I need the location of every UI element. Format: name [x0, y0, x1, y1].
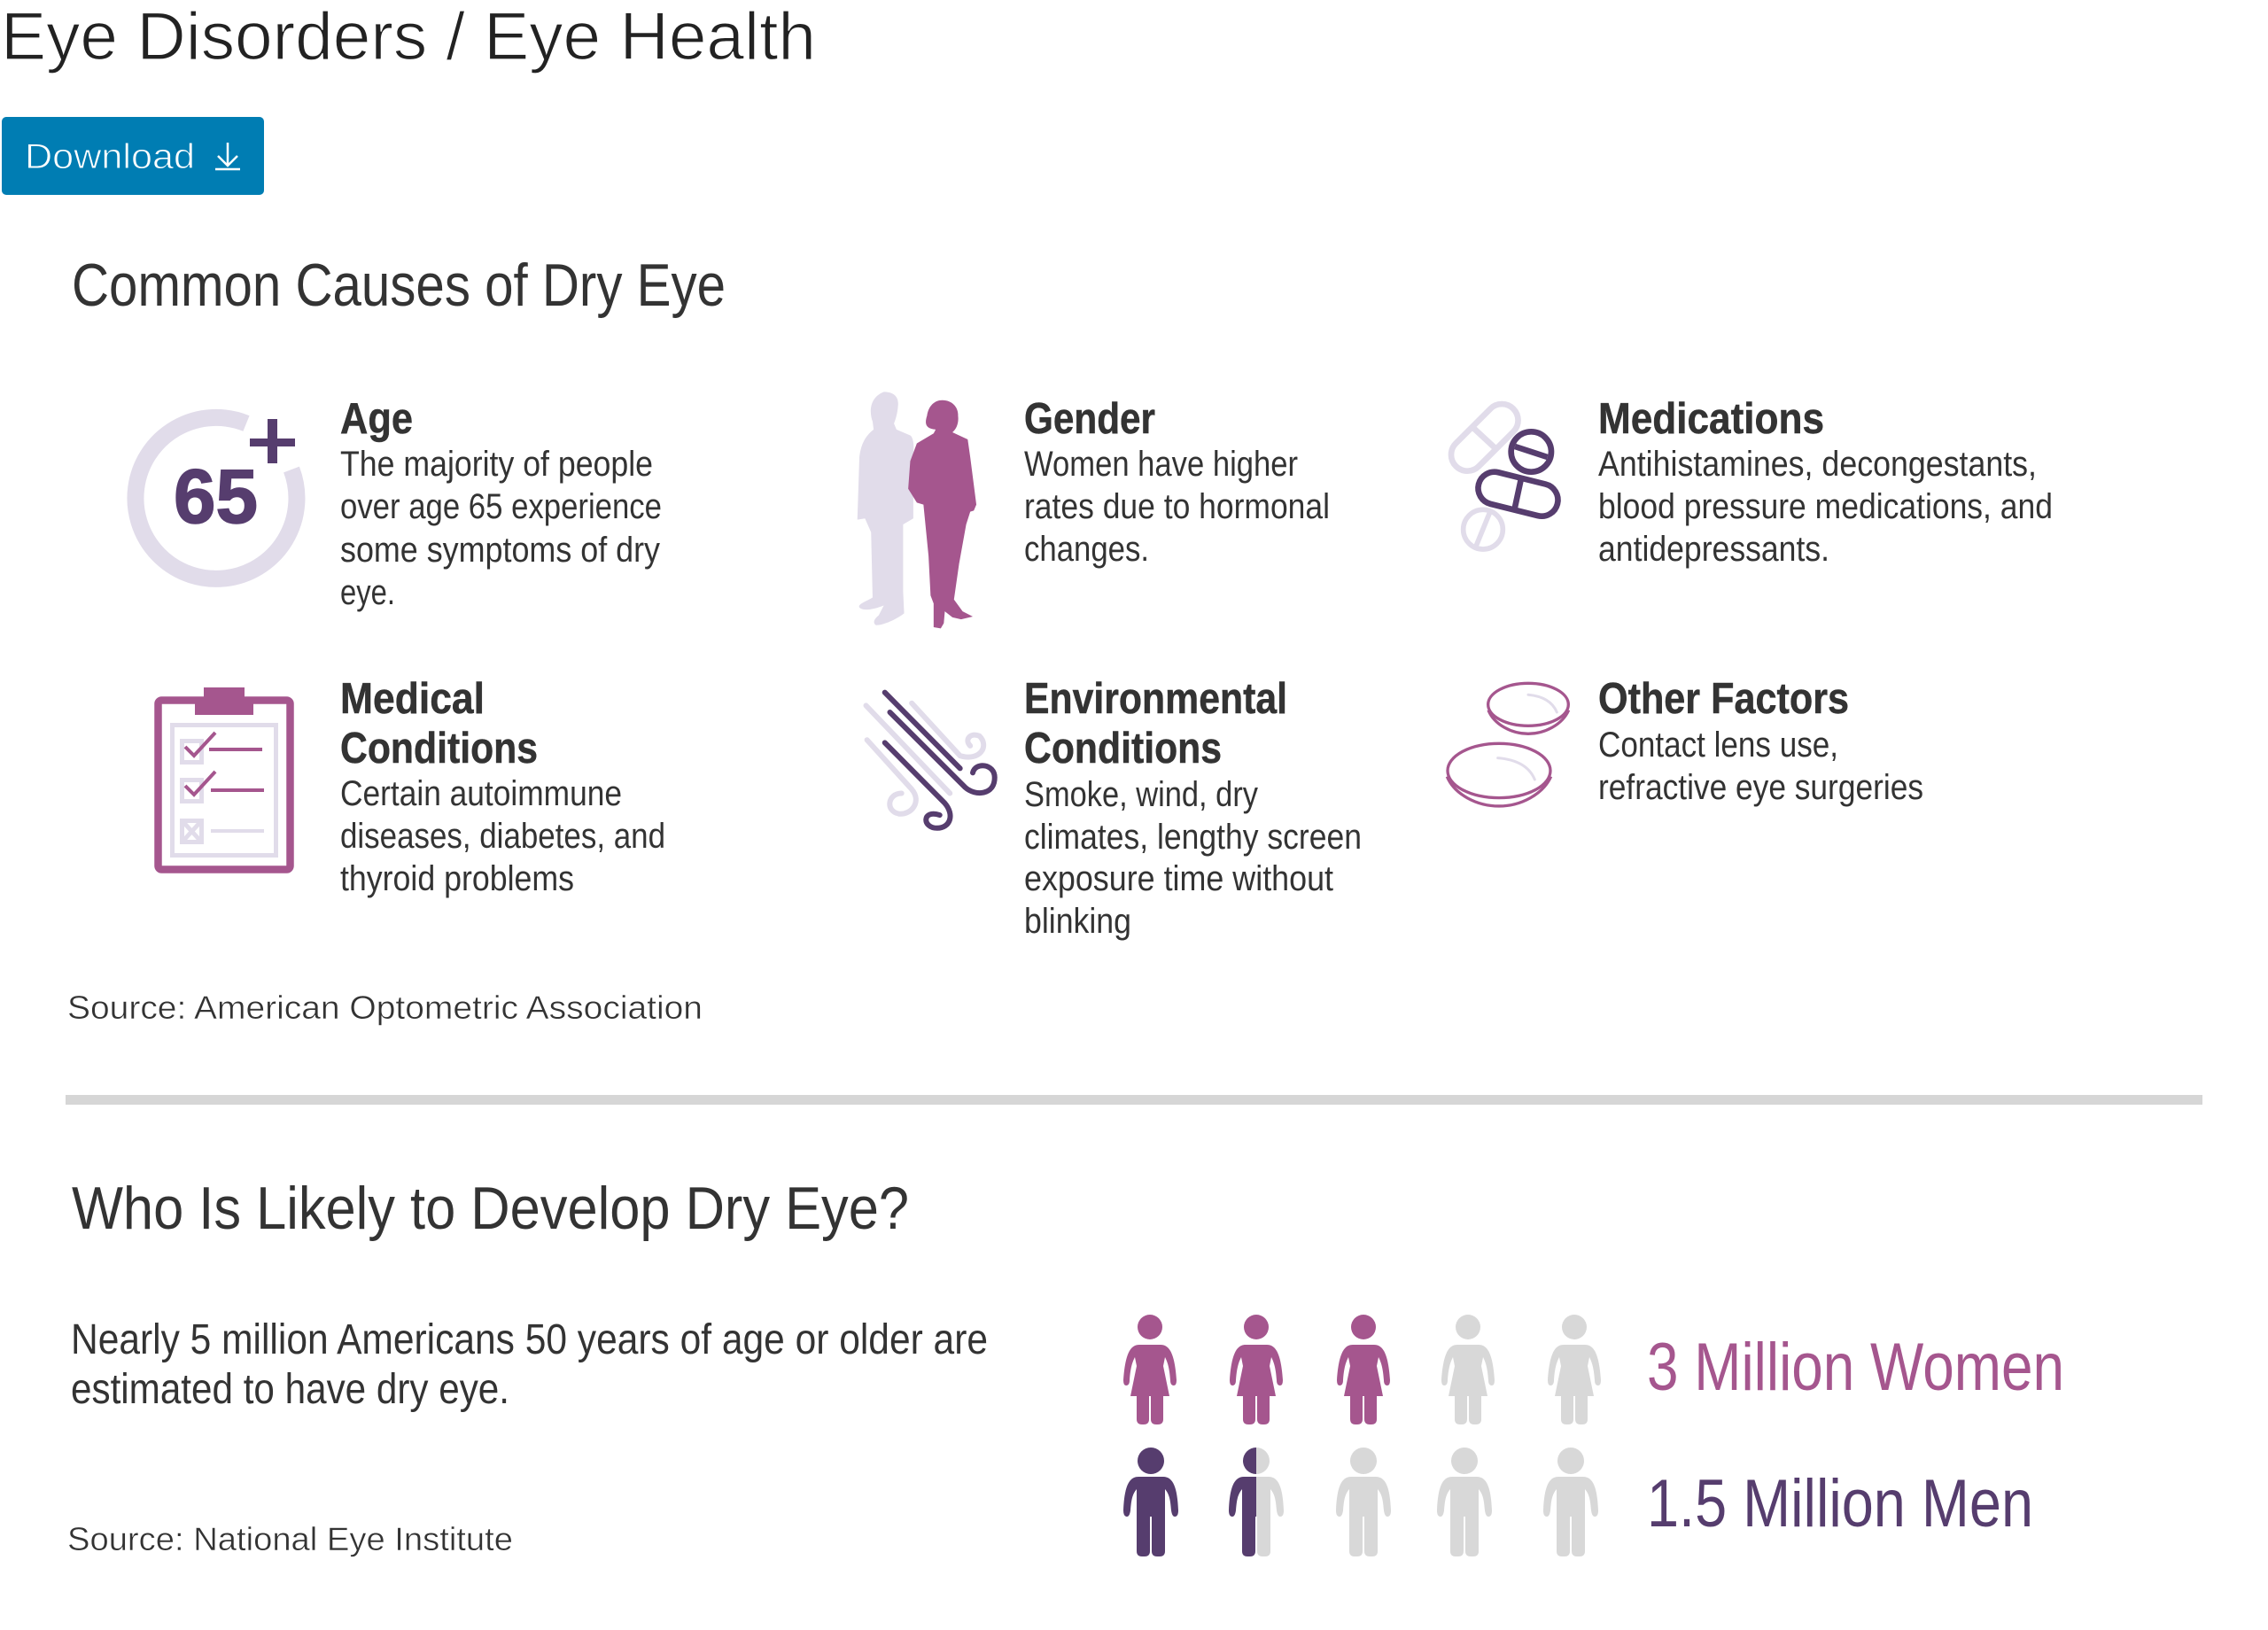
text: medical conditions description	[340, 774, 665, 898]
text: environmental description: climates, lengthy screen	[1024, 818, 1362, 857]
text: medications description	[1598, 445, 2053, 569]
panel: gender	[858, 392, 1330, 628]
icon: man and woman silhouettes	[858, 392, 976, 628]
heading: medications: Medications	[1598, 395, 1824, 443]
heading: who is likely: Who Is Likely to Develop Dry Eye?	[72, 1175, 909, 1242]
pictogram: women	[1123, 1315, 1601, 1424]
heading: other factors: Other Factors	[1598, 675, 1849, 723]
text: other factors description: Contact lens use,	[1598, 726, 1838, 765]
panel: environmental conditions	[866, 675, 1362, 941]
text: medications description: antidepressants.	[1598, 530, 1829, 569]
text: five million americans	[71, 1316, 988, 1413]
text: age description: over age 65 experience	[340, 487, 662, 526]
download button	[2, 117, 264, 195]
text: gender description: changes.	[1024, 530, 1149, 569]
title: Eye Disorders / Eye Health	[1, 0, 816, 74]
heading: environmental conditions	[1024, 675, 1287, 772]
text: five million americans: Nearly 5 million Americans 50 years of age or older are	[71, 1316, 988, 1363]
source: national eye institute: Source: National Eye Institute	[67, 1521, 513, 1557]
icon: 65 plus: 65	[174, 454, 258, 539]
text: environmental description: blinking	[1024, 902, 1131, 941]
icon: clipboard checklist	[158, 687, 291, 870]
label: 3 million women: 3 Million Women	[1647, 1330, 2064, 1405]
text: environmental description: exposure time without	[1024, 859, 1333, 898]
heading: environmental conditions: Conditions	[1024, 725, 1222, 772]
text: age description	[340, 445, 662, 612]
heading: medical conditions: Conditions	[340, 725, 538, 772]
panel: medications	[1444, 395, 2053, 569]
pictogram: men	[1123, 1448, 1598, 1556]
panel: medical conditions	[158, 675, 665, 898]
text: environmental description: Smoke, wind, dry	[1024, 775, 1258, 814]
heading: environmental conditions: Environmental	[1024, 675, 1287, 723]
icon: 65 plus	[136, 417, 297, 578]
icon: download arrow	[215, 143, 240, 169]
panel: age	[136, 395, 662, 612]
heading: medical conditions	[340, 675, 538, 772]
text: medications description: blood pressure medications, and	[1598, 487, 2053, 526]
text: gender description	[1024, 445, 1330, 569]
heading: common causes: Common Causes of Dry Eye	[72, 252, 726, 319]
download button: Download	[25, 137, 195, 176]
text: medical conditions description: thyroid problems	[340, 859, 574, 898]
heading: medical conditions: Medical	[340, 675, 485, 723]
heading: age: Age	[340, 395, 413, 443]
text: five million americans: estimated to have dry eye.	[71, 1366, 509, 1413]
heading: gender: Gender	[1024, 395, 1155, 443]
icon: pills	[1444, 398, 1561, 549]
text: other factors description: refractive eye surgeries	[1598, 768, 1923, 807]
text: other factors description	[1598, 726, 1923, 807]
text: age description: some symptoms of dry	[340, 531, 660, 570]
text: gender description: rates due to hormonal	[1024, 487, 1330, 526]
panel: other factors	[1447, 675, 1923, 807]
label: 1.5 million men: 1.5 Million Men	[1647, 1466, 2033, 1541]
text: gender description: Women have higher	[1024, 445, 1298, 484]
text: age description: eye.	[340, 573, 395, 612]
text: medications description: Antihistamines, decongestants,	[1598, 445, 2037, 484]
source: american optometric association: Source: American Optometric Association	[67, 990, 703, 1026]
icon: wind	[866, 693, 995, 828]
text: environmental description	[1024, 775, 1362, 941]
text: medical conditions description: Certain autoimmune	[340, 774, 622, 813]
icon: contact lenses	[1447, 683, 1569, 806]
text: age description: The majority of people	[340, 445, 653, 484]
text: medical conditions description: diseases, diabetes, and	[340, 817, 665, 856]
